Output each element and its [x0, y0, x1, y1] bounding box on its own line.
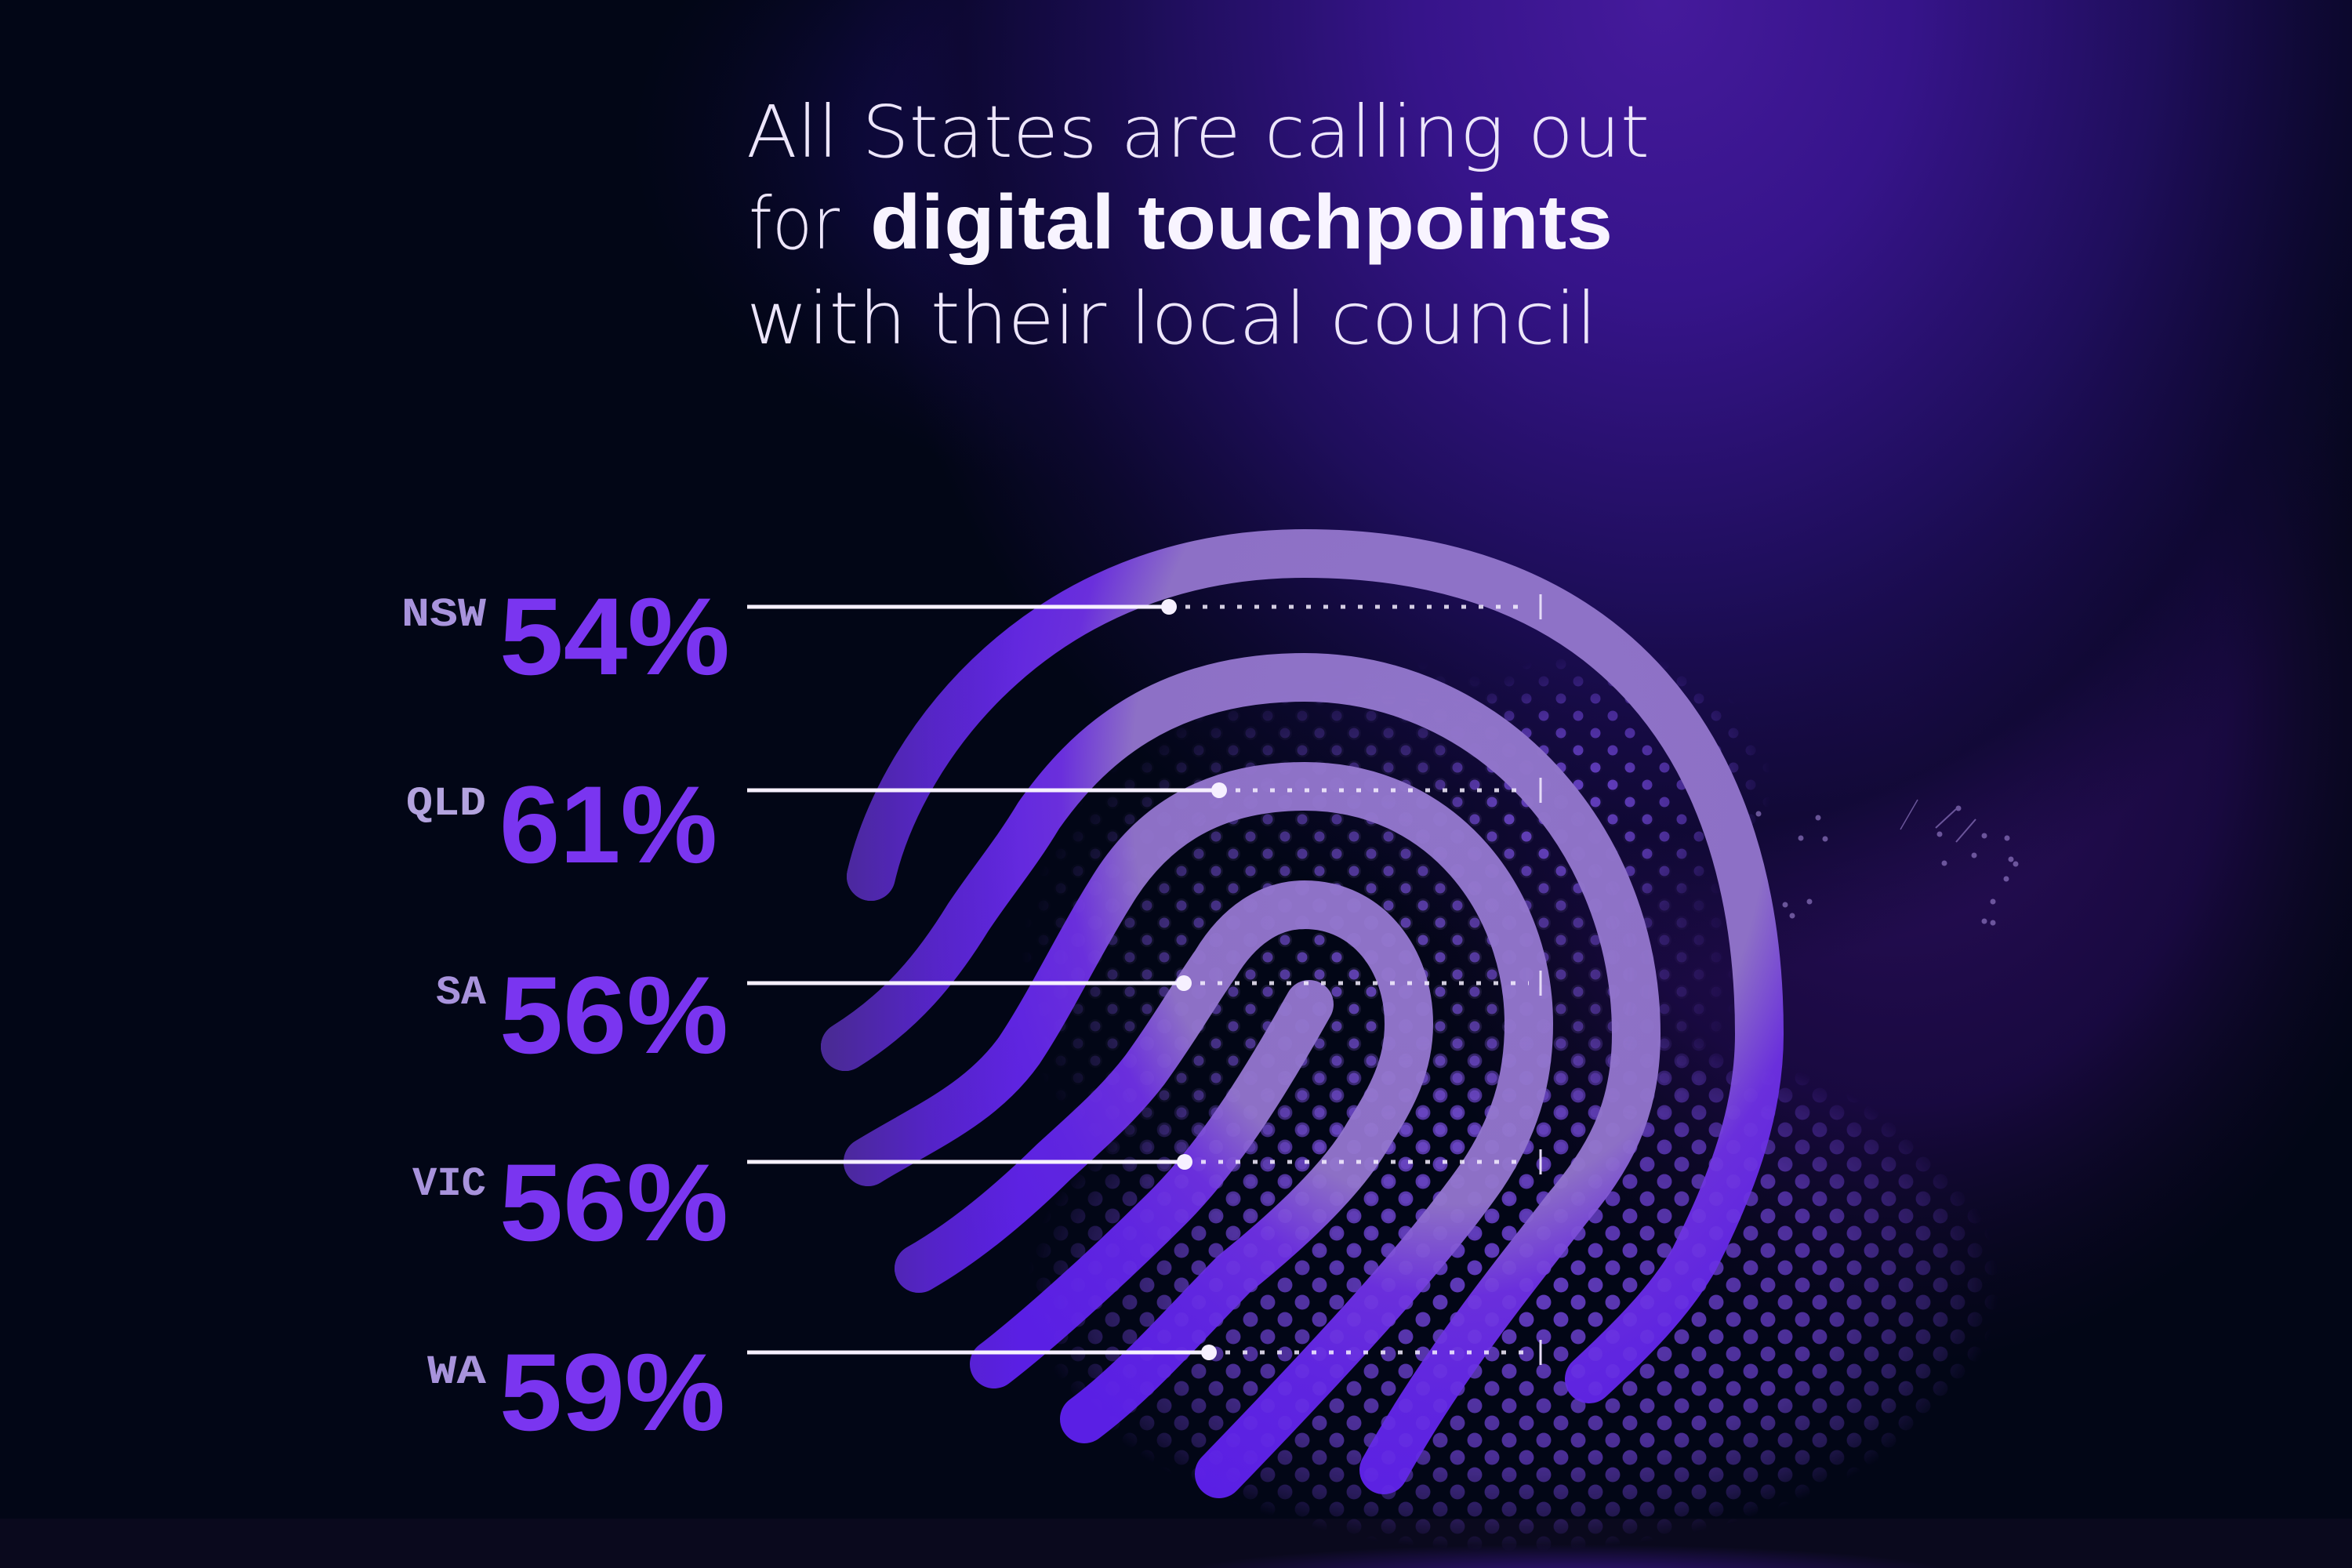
connector: VIC: [747, 1149, 1541, 1174]
value: 56%: 56%: [499, 1141, 728, 1264]
halftone dots over the fingerprint: [1089, 726, 1705, 1391]
ridge 3: [868, 786, 1529, 1474]
label: QLD: QLD: [406, 781, 486, 827]
value: 59%: 59%: [499, 1330, 725, 1454]
label: WA: WA: [427, 1349, 487, 1396]
connector: QLD: [747, 778, 1541, 803]
heading: for: [749, 182, 840, 266]
halftone dots behind the fingerprint: [1036, 660, 1989, 1546]
ridge 2: [845, 677, 1636, 1470]
value: 54%: 54%: [499, 575, 730, 698]
row: QLD 61%: [406, 763, 1541, 886]
heading: digital touchpoints: [870, 179, 1613, 265]
connector: WA: [747, 1340, 1541, 1365]
ridge 1 (outer): [871, 554, 1759, 1379]
heading: with their local council: [746, 277, 1597, 361]
heading: All States are calling out: [746, 90, 1650, 174]
ridge 4: [919, 905, 1409, 1419]
row: VIC 56%: [412, 1141, 1541, 1264]
connector: NSW: [747, 594, 1541, 619]
speckles at right: [1756, 800, 2018, 925]
connector: SA: [747, 971, 1541, 996]
row: WA 59%: [427, 1330, 1541, 1454]
darker tint on left ridge ends: [845, 554, 1305, 1364]
fingerprint ridges: [845, 554, 1759, 1474]
heading: [746, 90, 1650, 361]
row: NSW 54%: [401, 575, 1541, 698]
value: 56%: 56%: [499, 953, 728, 1076]
value: 61%: 61%: [499, 763, 717, 886]
row: SA 56%: [436, 953, 1541, 1076]
label: SA: SA: [436, 970, 487, 1016]
label: VIC: VIC: [412, 1161, 486, 1207]
label: NSW: NSW: [401, 592, 487, 638]
ridge 5 (inner): [994, 1004, 1309, 1364]
